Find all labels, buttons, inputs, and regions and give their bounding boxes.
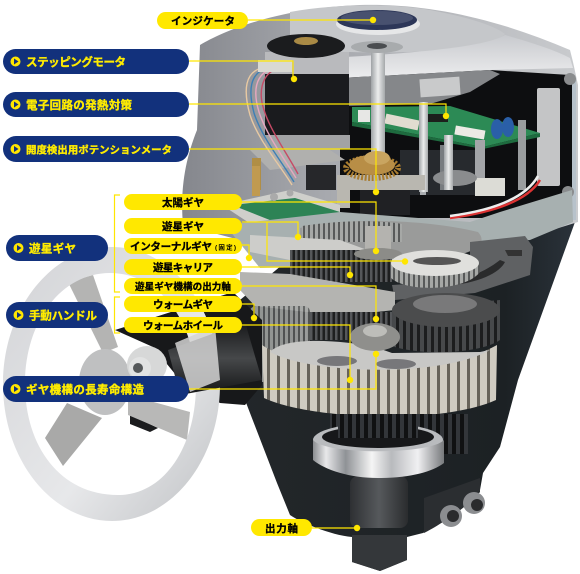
callout: electronics heat management: 電子回路の発熱対策 <box>26 98 132 112</box>
worm wheel <box>262 323 497 416</box>
callout: long-life gear structure <box>3 351 379 402</box>
bracket: planetary gear group <box>114 195 120 292</box>
callout: planet carrier: 遊星キャリア <box>153 261 214 274</box>
lower left board <box>222 166 340 230</box>
brass gear <box>337 151 425 215</box>
rear black mount <box>115 292 262 405</box>
planet carrier <box>240 272 395 316</box>
sun gear <box>290 226 402 282</box>
callout: stepping motor <box>3 49 297 82</box>
carrier plate right <box>392 236 533 300</box>
upright posts <box>419 102 453 192</box>
output shaft <box>350 476 480 571</box>
interior cavity <box>340 70 575 218</box>
indicator rod <box>351 41 403 158</box>
smoked window area <box>340 70 500 106</box>
indicator window <box>336 10 420 35</box>
lower dark gear <box>330 414 468 454</box>
callout: position potentiometer <box>3 136 379 195</box>
wheel rim <box>3 247 220 521</box>
silver bearing <box>313 416 444 478</box>
large black gear <box>300 293 500 352</box>
callout: planet gear <box>124 218 408 265</box>
callout: planetary gear group label <box>6 235 108 261</box>
callout: internal gear (fixed) <box>124 238 252 261</box>
callout: position potentiometer: 開度検出用ポテンションメータ <box>26 144 172 156</box>
side panel <box>537 88 560 186</box>
callout: electronics heat management <box>3 92 449 119</box>
bolts <box>440 492 485 527</box>
electronics below board <box>400 120 540 218</box>
callout: internal gear (fixed): (固定) <box>215 244 236 252</box>
callout: planetary output shaft <box>124 278 379 322</box>
callout: indicator: インジケータ <box>171 16 235 28</box>
callout: indicator <box>157 12 376 29</box>
manual handwheel <box>3 247 262 521</box>
callout: stepping motor: ステッピングモータ <box>26 55 126 69</box>
callout: worm gear: ウォームギヤ <box>153 299 213 311</box>
printed circuit board <box>352 106 540 149</box>
callout: output shaft: 出力軸 <box>265 522 298 535</box>
callout: sun gear: 太陽ギヤ <box>162 196 204 209</box>
dome light top <box>290 5 505 58</box>
black shaft <box>168 322 262 395</box>
hub flange <box>79 349 131 415</box>
callout: planetary output shaft: 遊星ギヤ機構の出力軸 <box>135 281 231 293</box>
worm gear <box>250 306 310 382</box>
callout: planet carrier <box>124 259 353 278</box>
silver dome <box>182 5 578 240</box>
planet gear large <box>391 250 480 288</box>
black lower housing <box>225 222 575 571</box>
callout: manual handle: 手動ハンドル <box>29 308 98 322</box>
callout: long-life gear structure: ギヤ機構の長寿命構造 <box>26 382 144 396</box>
callout: planetary gear group label: 遊星ギヤ <box>29 242 76 256</box>
wheel spokes <box>45 275 190 466</box>
callout: worm wheel: ウォームホイール <box>143 320 224 332</box>
translucent ring gear <box>250 221 482 262</box>
callout: sun gear <box>124 194 379 254</box>
callout: internal gear (fixed): インターナルギヤ <box>130 241 212 253</box>
motor <box>250 34 350 190</box>
motor wires <box>246 60 298 185</box>
translucent plate <box>225 190 573 268</box>
callout: planet gear: 遊星ギヤ <box>162 220 204 233</box>
callout: worm wheel <box>124 317 353 383</box>
callout: worm gear <box>124 296 257 321</box>
callout: output shaft <box>251 519 360 536</box>
callout: manual handle <box>6 302 108 328</box>
bracket: worm group <box>114 297 120 333</box>
